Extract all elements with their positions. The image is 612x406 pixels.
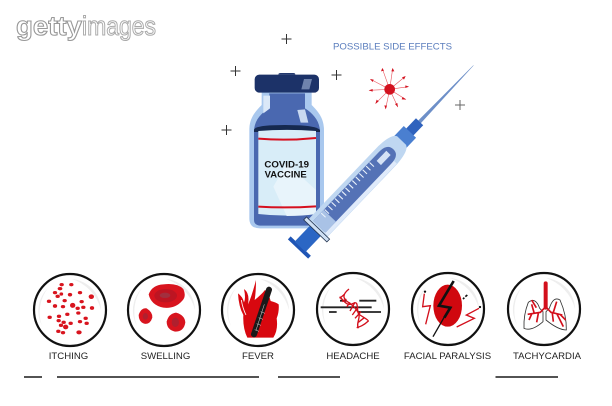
watermark logo: getty (16, 11, 82, 41)
vaccine vial (249, 73, 324, 228)
baseline dividers (24, 376, 558, 378)
needle (414, 64, 475, 127)
label: itching: ITCHING (49, 351, 88, 362)
icon: itching (34, 274, 106, 346)
plunger (288, 236, 311, 259)
barrel (307, 132, 411, 239)
vial liquid (254, 93, 320, 226)
icon: swelling (128, 274, 200, 346)
icon: facial paralysis (412, 273, 484, 345)
sparkle stars (222, 34, 465, 135)
vial label (258, 130, 316, 216)
label: fever: FEVER (242, 351, 274, 362)
vial cap (255, 73, 319, 93)
barrel liquid (313, 143, 399, 232)
vial glass body (249, 92, 324, 228)
watermark logo (16, 11, 156, 41)
icon: virus burst (369, 68, 409, 109)
icon: tachycardia lungs (508, 273, 580, 345)
label: tachycardia: TACHYCARDIA (513, 351, 582, 362)
needle hub (404, 118, 423, 138)
flame (238, 280, 279, 338)
icon: headache (317, 273, 389, 345)
vial label: VACCINE (265, 169, 307, 179)
label: facial paralysis: FACIAL PARALYSIS (404, 351, 491, 362)
watermark logo: images (82, 11, 156, 41)
syringe (286, 54, 485, 260)
icon: fever (222, 274, 294, 346)
label: swelling: SWELLING (141, 351, 190, 362)
thermometer (254, 290, 269, 334)
vial label: COVID-19 (264, 160, 309, 170)
heading: possible side effects: POSSIBLE SIDE EFFECTS (333, 42, 452, 52)
label: headache: HEADACHE (326, 351, 380, 362)
barrel scale marks (321, 163, 374, 217)
